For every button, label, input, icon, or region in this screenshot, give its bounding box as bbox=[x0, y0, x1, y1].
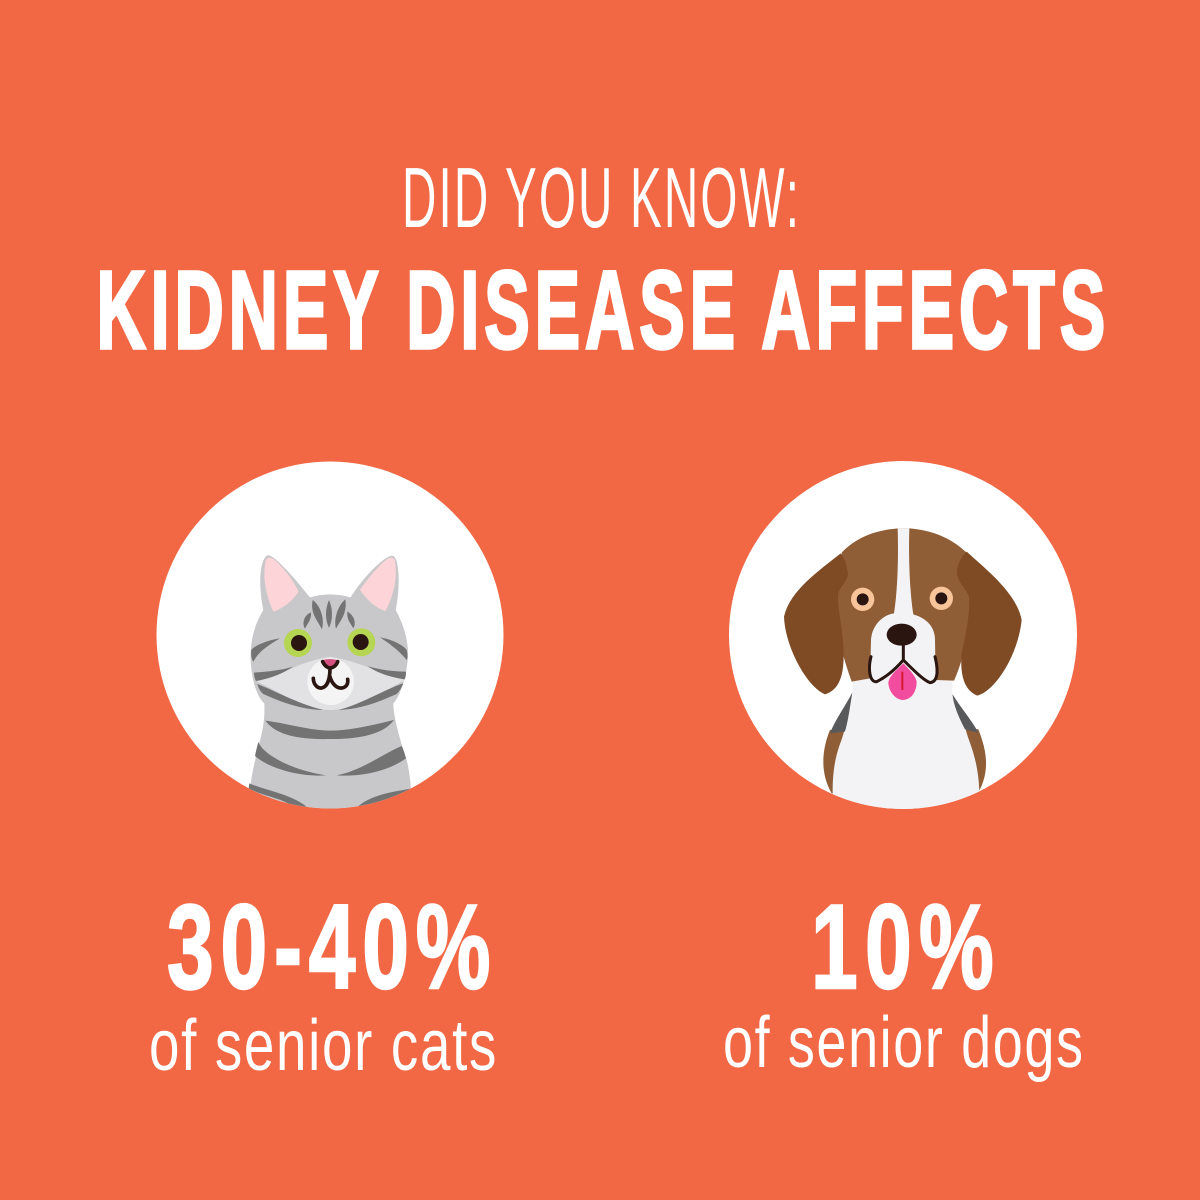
cat circle bbox=[156, 462, 504, 808]
heading: did you know: DID YOU KNOW: bbox=[402, 150, 799, 246]
icon: cat bbox=[248, 555, 412, 810]
stat: dogs percentage: 10% bbox=[811, 879, 994, 1013]
icon: dog bbox=[784, 528, 1022, 810]
dog circle bbox=[729, 461, 1077, 809]
caption: of senior dogs: of senior dogs bbox=[723, 1003, 1083, 1083]
panel: cat bbox=[156, 462, 504, 810]
panel: dog bbox=[729, 461, 1077, 810]
caption: of senior cats: of senior cats bbox=[149, 1005, 496, 1086]
heading: kidney disease affects: KIDNEY DISEASE AFFECTS bbox=[96, 249, 1105, 372]
stat: cats percentage: 30-40% bbox=[167, 879, 490, 1013]
